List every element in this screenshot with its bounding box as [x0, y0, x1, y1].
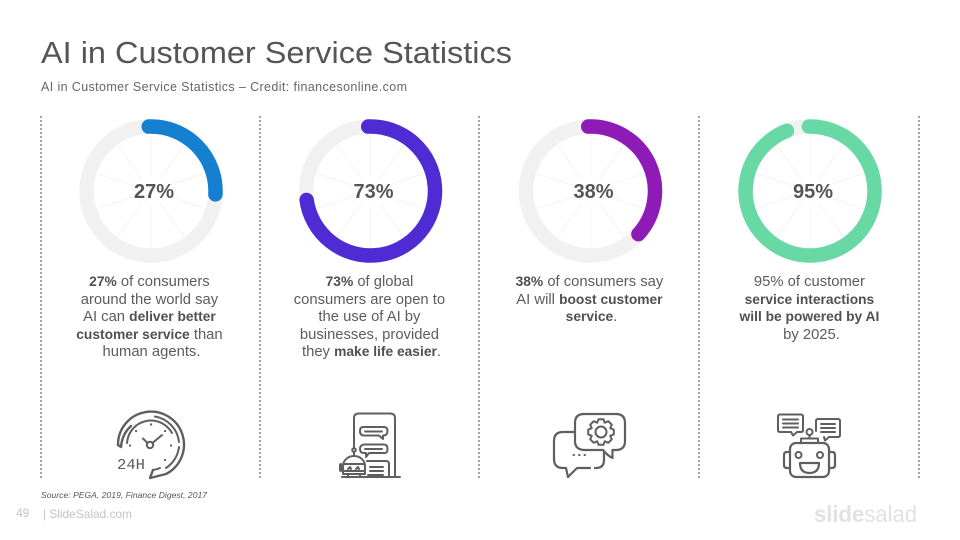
page number: 49 — [16, 506, 30, 520]
text block: 73 percent description: they make life easier. — [302, 344, 441, 360]
panel: 27 percent — [76, 126, 227, 478]
icon: chatbot with phone — [340, 414, 400, 477]
text block: 73 percent description: businesses, provided — [300, 327, 439, 343]
text block: 95 percent description: will be powered by AI — [739, 309, 879, 324]
donut chart: 95%: 95% — [793, 181, 833, 203]
donut chart: 38%: 38% — [573, 181, 614, 203]
donut chart: 27% — [86, 126, 216, 256]
text block: 38 percent description: 38% of consumers say — [516, 274, 663, 290]
panel: 95 percent — [739, 126, 883, 477]
text block: 73 percent description: the use of AI by — [318, 309, 421, 325]
footer site name: | SlideSalad.com — [43, 507, 132, 521]
icon: 24 hour clock: 24H — [117, 457, 145, 474]
title: AI in Customer Service Statistics — [41, 35, 512, 70]
text block: 73 percent description: consumers are open to — [294, 292, 445, 308]
donut chart: 27%: 27% — [134, 181, 174, 203]
panel: 38 percent — [516, 126, 667, 477]
donut chart: 38% — [526, 126, 655, 256]
icon: speech bubbles with gear — [554, 414, 625, 477]
text block: 95 percent description: service interactions — [745, 292, 875, 307]
text block: 27 percent description: human agents. — [103, 344, 200, 360]
text block: 27 percent description: customer service than — [76, 327, 223, 343]
donut chart: 73%: 73% — [353, 181, 394, 203]
donut chart: 95% — [746, 126, 875, 255]
text block: 27 percent description: 27% of consumers — [89, 274, 210, 290]
icon: 24 hour clock — [117, 412, 184, 478]
panel: 73 percent — [294, 126, 449, 477]
text block: 73 percent description: 73% of global — [326, 274, 413, 290]
donut chart: 73% — [306, 126, 435, 256]
subtitle: AI in Customer Service Statistics – Credit: financesonline.com — [41, 80, 407, 94]
text block: 27 percent description: around the world say — [81, 292, 219, 308]
icon: robot with speech bubbles — [778, 414, 840, 477]
source note: Source: PEGA, 2019, Finance Digest, 2017 — [41, 490, 207, 500]
logo: slidesalad: slidesalad — [814, 501, 917, 527]
text block: 38 percent description: AI will boost customer — [516, 292, 663, 308]
text block: 95 percent description: 95% of customer — [754, 274, 865, 290]
text block: 27 percent description: AI can deliver better — [83, 309, 216, 325]
text block: 38 percent description: service. — [566, 309, 617, 325]
text block: 95 percent description: by 2025. — [783, 327, 840, 343]
